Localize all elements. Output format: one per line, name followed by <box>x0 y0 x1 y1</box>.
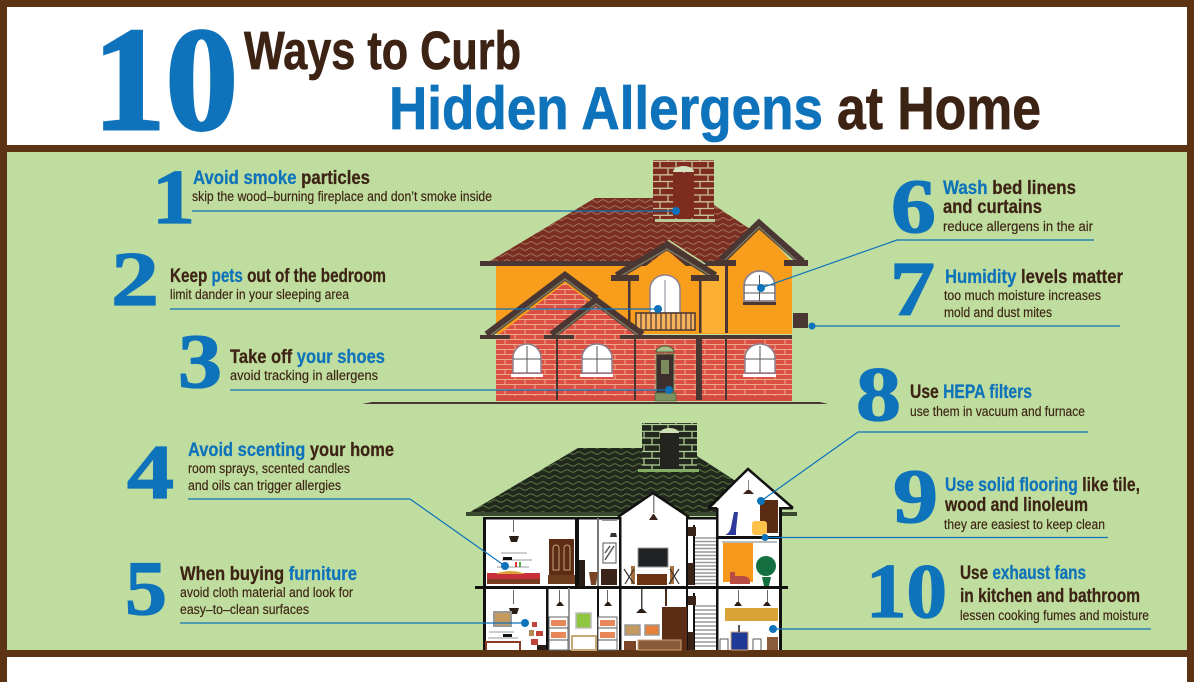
item 7: too much moisture increases <box>944 288 1101 303</box>
item 2: Keep pets out of the bedroom <box>170 266 386 287</box>
lower bedroom <box>486 590 546 650</box>
title: 10 <box>93 0 238 162</box>
item 10: lessen cooking fumes and moisture <box>960 608 1149 623</box>
left gables <box>480 276 792 400</box>
item 7: Humidity levels matter <box>945 267 1124 288</box>
dressing room <box>579 520 617 586</box>
title <box>93 0 1041 162</box>
item 8 <box>757 351 1088 505</box>
item 9 <box>762 453 1140 541</box>
chimney <box>638 423 699 472</box>
laundry room <box>722 541 777 586</box>
illustration: brick house exterior <box>362 160 828 404</box>
item 8: use them in vacuum and furnace <box>910 404 1085 419</box>
lower lounge <box>624 589 687 650</box>
item 1: Avoid smoke particles <box>193 168 370 189</box>
item 10: 10 <box>866 548 947 634</box>
item 4: and oils can trigger allergies <box>188 478 341 493</box>
item 8: Use HEPA filters <box>910 382 1032 403</box>
item 5: easy–to–clean surfaces <box>180 602 309 617</box>
item 5: avoid cloth material and look for <box>180 585 353 600</box>
item 3: avoid tracking in allergens <box>230 368 378 383</box>
gable rooms <box>618 469 793 650</box>
item 6: and curtains <box>943 197 1042 218</box>
item 7: 7 <box>890 246 935 332</box>
item 4: 4 <box>127 429 174 515</box>
title: at Home <box>837 75 1041 142</box>
item 3 <box>178 318 673 404</box>
item 8: 8 <box>856 351 901 437</box>
title: Ways to Curb <box>244 21 521 81</box>
item 2 <box>111 236 662 322</box>
lower windows and door <box>511 344 776 401</box>
item 3: 3 <box>178 318 222 404</box>
item 5: 5 <box>125 545 167 631</box>
title: Hidden Allergens <box>389 75 823 142</box>
item 6: Wash bed linens <box>943 178 1076 199</box>
item 1 <box>152 154 680 240</box>
centre gable <box>611 240 719 333</box>
upstairs bedroom <box>487 520 575 584</box>
roof <box>490 198 756 262</box>
item 9: wood and linoleum <box>944 495 1088 516</box>
stairs <box>688 525 716 650</box>
item 6: 6 <box>891 163 936 249</box>
brick lower wall <box>496 335 792 400</box>
item 4: Avoid scenting your home <box>188 440 394 461</box>
item 7: mold and dust mites <box>944 305 1052 320</box>
roof <box>470 448 745 512</box>
item 5 <box>125 545 529 631</box>
item 6 <box>757 163 1094 292</box>
item 5: When buying furniture <box>180 564 357 585</box>
item 9: 9 <box>893 453 938 539</box>
wall vent box <box>793 313 808 328</box>
item 4: room sprays, scented candles <box>188 461 350 476</box>
structure lines <box>475 508 788 650</box>
upper windows and balcony <box>636 271 776 330</box>
living room TV <box>624 495 679 585</box>
item 3: Take off your shoes <box>230 347 385 368</box>
ground line <box>362 402 828 404</box>
chimney <box>653 160 715 222</box>
item 1: skip the wood–burning fireplace and don’t smoke inside <box>192 189 492 204</box>
item 1: 1 <box>152 154 195 240</box>
closets and picture <box>549 590 617 650</box>
orange walls <box>496 266 792 334</box>
item 4 <box>127 429 509 570</box>
item 9: Use solid flooring like tile, <box>945 475 1140 496</box>
attic room <box>725 480 778 535</box>
item 2: 2 <box>111 236 159 322</box>
illustration: house cross-section <box>466 423 797 650</box>
item 10: in kitchen and bathroom <box>960 586 1140 607</box>
item 9: they are easiest to keep clean <box>944 517 1105 532</box>
right gable <box>715 224 808 333</box>
item 6: reduce allergens in the air <box>943 219 1093 234</box>
item 2: limit dander in your sleeping area <box>170 287 349 302</box>
item 10 <box>769 548 1151 634</box>
interior walls <box>484 518 780 650</box>
kitchen and bath <box>720 590 778 650</box>
item 10: Use exhaust fans <box>960 563 1086 584</box>
item 7 <box>808 246 1124 332</box>
